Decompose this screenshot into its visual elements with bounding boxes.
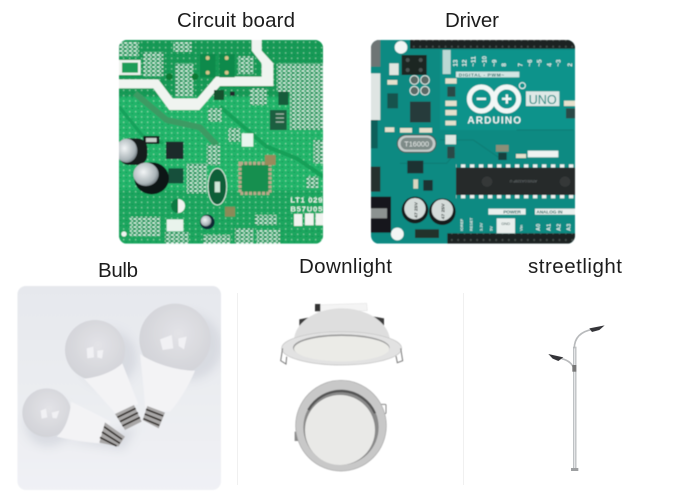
panel: bulb photo xyxy=(17,286,222,490)
arduino logo xyxy=(469,87,519,111)
mounting holes xyxy=(395,41,407,54)
atmega chip xyxy=(456,164,575,198)
top pin labels: ~11 xyxy=(471,56,478,67)
small bulb xyxy=(22,388,125,447)
front view downlight xyxy=(295,380,386,471)
heading: streetlight: streetlight xyxy=(528,255,622,278)
panel: driver board photo: DIGITAL - PWM~ xyxy=(459,72,505,78)
upper arm xyxy=(574,329,593,348)
top pin labels: ~3 xyxy=(556,59,563,67)
panel: driver board photo: 47 25V xyxy=(441,203,447,219)
top pin labels: 7 xyxy=(518,63,525,67)
white copper trace xyxy=(119,40,273,110)
microcontroller xyxy=(410,102,431,122)
top view downlight xyxy=(281,303,403,365)
bottom pin labels: A0 xyxy=(536,224,542,231)
icons row xyxy=(528,151,558,157)
pole xyxy=(573,347,576,469)
top pin labels: 12 xyxy=(462,59,469,67)
top pin labels: ~6 xyxy=(527,59,534,67)
panel: driver board photo: IOREF xyxy=(459,218,464,231)
main qfp area xyxy=(240,163,270,193)
bottom header xyxy=(447,233,575,244)
panel: driver board photo: 5V xyxy=(489,226,494,231)
power regulator xyxy=(371,167,380,192)
capacitors xyxy=(402,197,428,223)
analog label xyxy=(535,209,575,215)
small smd parts xyxy=(389,63,399,75)
crystal xyxy=(208,168,227,205)
heading: Circuit board: Circuit board xyxy=(177,9,295,32)
capacitors xyxy=(119,138,147,165)
power jack xyxy=(371,197,391,233)
panel: driver board photo xyxy=(371,40,575,244)
top header xyxy=(410,40,575,49)
usb port xyxy=(371,40,380,67)
white pads xyxy=(294,214,302,226)
shadows xyxy=(25,313,222,450)
board lettering: LT1 029 xyxy=(290,195,322,204)
digital label xyxy=(456,72,519,77)
heading: Downlight: Downlight xyxy=(299,255,392,278)
middle bulb xyxy=(65,320,142,430)
dark trace band xyxy=(135,93,217,145)
pin header xyxy=(402,55,427,75)
top pin labels xyxy=(453,55,574,67)
power label xyxy=(488,209,526,215)
panel: driver board photo: RESET xyxy=(469,217,474,231)
panel: driver board photo: 3.3V xyxy=(479,222,484,231)
bottom pin labels: A3 xyxy=(567,224,573,231)
heading: Driver: Driver xyxy=(445,9,499,32)
top pin labels: ~10 xyxy=(482,55,489,67)
lower arm xyxy=(562,359,574,370)
atmega chip: ATMEGA328P U xyxy=(509,179,537,183)
GND pad xyxy=(497,218,515,233)
lower lamp head xyxy=(548,354,563,361)
panel: streetlight photo xyxy=(548,325,605,471)
panel: driver board photo: Vin xyxy=(519,224,524,231)
top pin labels: 2 xyxy=(567,63,574,67)
panel: driver board photo: ANALOG IN xyxy=(536,209,563,214)
panel: circuit board photo: B57U05 xyxy=(290,204,323,213)
ARDUINO wordmark: ARDUINO xyxy=(467,116,521,127)
coil ic xyxy=(270,110,287,130)
panel: driver board photo: T16000 xyxy=(404,139,429,148)
big bulb xyxy=(139,304,211,428)
crystal xyxy=(397,135,436,152)
green vias xyxy=(166,73,173,80)
panel: driver board photo: UNO xyxy=(529,93,557,107)
bottom pin labels: A1 xyxy=(547,224,553,231)
panel: driver board photo: 47 25V xyxy=(413,201,419,218)
bottom pin labels: A2 xyxy=(557,224,563,231)
top pin labels: 4 xyxy=(547,63,554,67)
top pin labels: 8 xyxy=(501,63,508,67)
top pin labels: ~5 xyxy=(537,59,544,67)
bottom pin labels xyxy=(536,224,573,231)
UNO badge xyxy=(526,91,559,106)
top pin labels: ~9 xyxy=(492,59,499,67)
silkscreen clusters xyxy=(119,42,139,57)
pads xyxy=(410,76,419,84)
top pin labels: 13 xyxy=(453,59,460,67)
panel: downlight photo xyxy=(281,303,403,471)
GND tab xyxy=(443,50,451,74)
upper lamp head xyxy=(589,325,605,332)
heading: Bulb: Bulb xyxy=(98,259,138,282)
black ic xyxy=(166,142,183,159)
panel: circuit board photo xyxy=(116,40,323,244)
panel: driver board photo: POWER xyxy=(503,209,522,214)
panel: driver board photo: GND xyxy=(501,221,510,226)
small ics xyxy=(407,161,423,173)
